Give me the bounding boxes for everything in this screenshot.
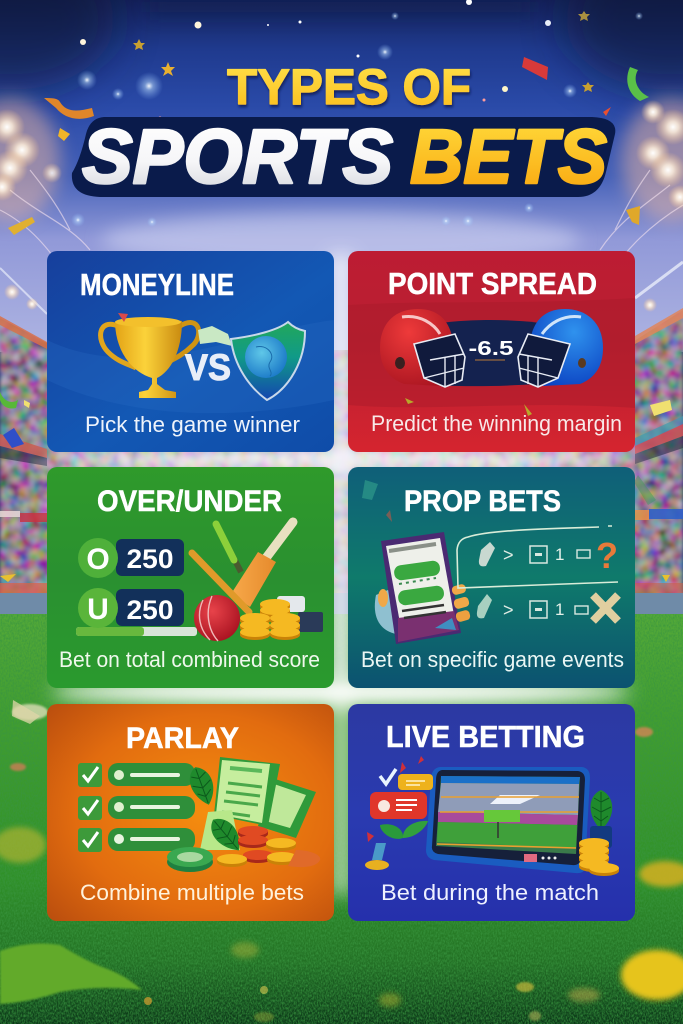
sparkles and bokeh bbox=[71, 0, 643, 227]
prop row one: ? bbox=[596, 535, 618, 576]
icon: coin stacks bbox=[240, 596, 323, 640]
icon: coin stack right bbox=[579, 826, 619, 876]
prop row two: > bbox=[503, 600, 514, 620]
icon: yellow chat bubble bbox=[398, 774, 433, 790]
description: Bet during the match bbox=[381, 880, 599, 905]
checklist bbox=[78, 763, 195, 852]
icon: leaves bbox=[185, 763, 247, 857]
icon: cricket bats and ball bbox=[192, 522, 293, 641]
prop row one: > bbox=[503, 545, 514, 565]
heading banner: sports bets bbox=[72, 114, 615, 200]
prop row one: 1 bbox=[555, 545, 564, 564]
icon: shield bbox=[231, 322, 305, 400]
icon: leaf right bbox=[590, 790, 612, 830]
panel: live betting bbox=[348, 704, 635, 921]
heading: PARLAY bbox=[126, 722, 239, 755]
heading: PROP BETS bbox=[404, 485, 561, 518]
icon: blue helmet bbox=[518, 309, 603, 387]
background: night stadium sky bbox=[0, 0, 683, 352]
over row bbox=[78, 538, 184, 578]
leaf and blurred foreground bits bbox=[0, 704, 683, 1022]
leaf bits bbox=[405, 398, 532, 416]
heading: MONEYLINE bbox=[80, 267, 234, 302]
heading line: types of: TYPES OF bbox=[227, 59, 471, 115]
background: grass field bbox=[0, 614, 683, 1024]
description: Bet on specific game events bbox=[361, 647, 624, 672]
description: Pick the game winner bbox=[85, 412, 300, 437]
icon: chips and coins bbox=[167, 826, 320, 872]
over row: 250 bbox=[126, 544, 174, 574]
background: stadium crowd bbox=[0, 262, 683, 617]
heading: LIVE BETTING bbox=[386, 719, 585, 754]
description: Predict the winning margin bbox=[371, 411, 622, 436]
title bbox=[72, 59, 615, 200]
icon: small confetti bbox=[367, 756, 424, 842]
icon: ribbon bbox=[198, 326, 232, 346]
confetti bbox=[0, 57, 672, 724]
heading: OVER/UNDER bbox=[97, 485, 282, 518]
panel: point spread bbox=[348, 251, 635, 452]
prop row two: 1 bbox=[555, 600, 564, 619]
icon: tablet with match bbox=[426, 767, 590, 873]
stadium lights right bbox=[600, 98, 683, 312]
spread banner bbox=[423, 320, 560, 386]
heading: POINT SPREAD bbox=[388, 266, 597, 301]
panel: moneyline bbox=[47, 251, 334, 452]
heading banner: sports bets: BETS bbox=[410, 114, 607, 200]
icon: leaves left bbox=[380, 821, 428, 839]
description: Bet on total combined score bbox=[59, 647, 320, 672]
under row: U bbox=[87, 593, 109, 626]
panel: prop bets bbox=[348, 467, 635, 688]
background: center light glow bbox=[41, 255, 641, 895]
vs label: VS bbox=[185, 347, 231, 388]
spread banner: -6.5 bbox=[468, 338, 514, 360]
under row bbox=[76, 588, 197, 636]
heading banner: sports bets: SPORTS bbox=[82, 114, 393, 200]
icon: red helmet bbox=[380, 309, 465, 387]
prop panel outline bbox=[457, 526, 618, 588]
under row: 250 bbox=[126, 595, 174, 625]
icon: red chat bubble bbox=[370, 792, 427, 819]
description: Combine multiple bets bbox=[80, 880, 304, 905]
icon: gold trophy bbox=[101, 313, 199, 398]
panel: parlay bbox=[47, 704, 334, 921]
prop row one bbox=[479, 535, 618, 576]
icon: check mark bbox=[380, 769, 396, 784]
panel: over/under bbox=[47, 467, 334, 688]
icon: betting tickets bbox=[214, 757, 316, 838]
prop row two bbox=[477, 594, 618, 621]
icon: smartphone with hand bbox=[375, 532, 471, 644]
over row: O bbox=[86, 543, 110, 576]
stadium lights left bbox=[0, 98, 90, 310]
icon: mini trophy bbox=[365, 843, 389, 870]
